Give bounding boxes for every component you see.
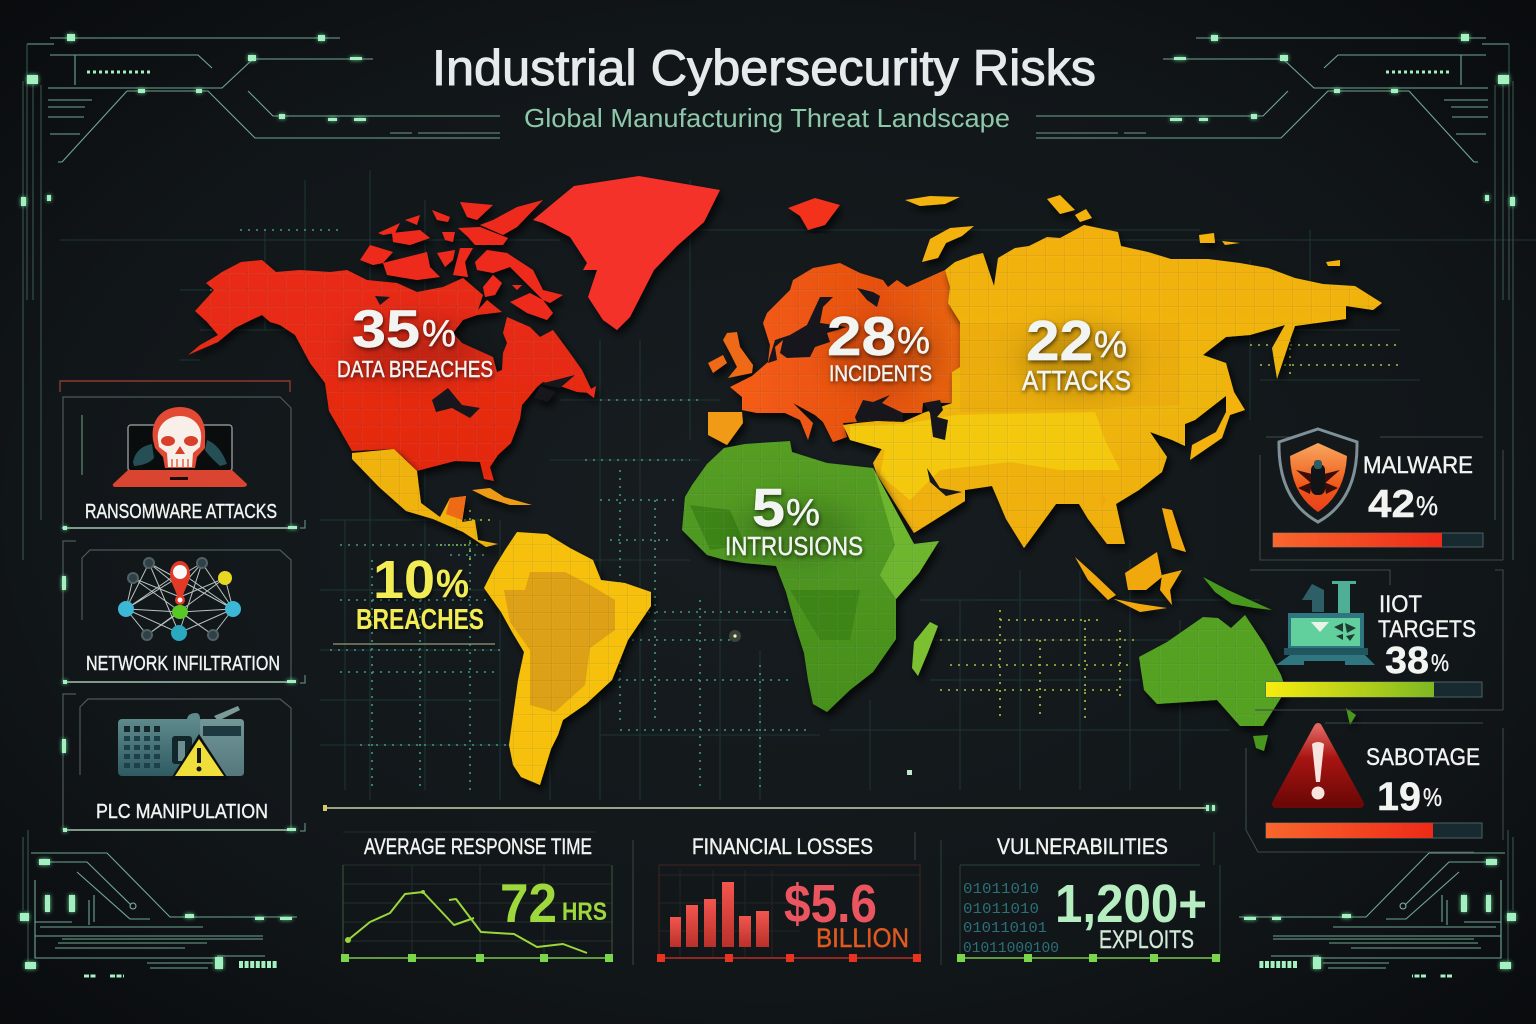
value: EXPLOITS bbox=[1099, 926, 1194, 954]
map label: North America 35%: 35 bbox=[352, 300, 420, 359]
label: SABOTAGE bbox=[1366, 744, 1480, 771]
title: Industrial Cybersecurity Risks bbox=[432, 40, 1096, 96]
header circuit traces bbox=[21, 34, 1515, 560]
binary code block: 010110101 bbox=[963, 920, 1047, 937]
label: IIOT bbox=[1379, 591, 1422, 618]
heading: AVERAGE RESPONSE TIME bbox=[364, 834, 592, 859]
label: NETWORK INFILTRATION bbox=[86, 652, 280, 675]
axis bbox=[957, 954, 1220, 962]
label: RANSOMWARE ATTACKS bbox=[85, 500, 277, 523]
region: Iceland bbox=[788, 198, 840, 230]
panel: IIoT targets bbox=[1250, 570, 1503, 710]
binary code block: 01011000100 bbox=[963, 940, 1059, 957]
region: Asia bbox=[843, 195, 1382, 612]
panel: network infiltration bbox=[62, 541, 305, 684]
divider above stats bbox=[323, 805, 1215, 811]
panel: PLC manipulation bbox=[62, 694, 305, 832]
panel: ransomware attacks bbox=[60, 381, 305, 530]
panel: vulnerabilities bbox=[941, 832, 1220, 965]
heading: VULNERABILITIES bbox=[997, 834, 1168, 859]
map label: South America 10% bbox=[333, 550, 495, 644]
value: HRS bbox=[562, 898, 607, 926]
map label: North America 35%: % bbox=[422, 313, 456, 355]
icon: PLC with warning triangle bbox=[118, 706, 244, 780]
map label: Europe 28%: 28 bbox=[827, 305, 896, 367]
icon: skull on laptop bbox=[113, 407, 247, 487]
value: 42 bbox=[1368, 483, 1415, 526]
heading: FINANCIAL LOSSES bbox=[692, 834, 873, 859]
map label: North America 35%: DATA BREACHES bbox=[337, 356, 493, 382]
map label: Europe 28%: INCIDENTS bbox=[829, 361, 932, 386]
binary code block bbox=[963, 881, 1059, 957]
map label: Asia 22%: 22 bbox=[1026, 309, 1093, 373]
label: PLC MANIPULATION bbox=[96, 800, 268, 823]
progress bar bbox=[1273, 533, 1483, 547]
region: North America bbox=[188, 200, 596, 481]
label: MALWARE bbox=[1363, 452, 1473, 479]
icon: industrial terminal bbox=[1276, 581, 1375, 665]
map label: South America 10%: % bbox=[436, 562, 469, 606]
map label: Africa 5% bbox=[725, 478, 863, 561]
map label: South America 10%: BREACHES bbox=[356, 604, 484, 636]
value: 38 bbox=[1385, 640, 1429, 682]
background circuit grid bbox=[60, 170, 1536, 800]
region: Mexico and Central America bbox=[352, 449, 532, 547]
region: Australia and Oceania bbox=[1139, 577, 1356, 751]
panel: financial losses bbox=[633, 832, 921, 965]
map label: Africa 5%: INTRUSIONS bbox=[725, 531, 863, 561]
value bbox=[1385, 640, 1449, 682]
panel: average response time bbox=[341, 832, 613, 962]
map label: Asia 22%: ATTACKS bbox=[1022, 365, 1131, 396]
map label: South America 10%: 10 bbox=[373, 550, 435, 610]
line chart bbox=[341, 890, 613, 962]
progress bar bbox=[1266, 823, 1482, 838]
progress bar bbox=[1266, 682, 1482, 697]
panel: malware bbox=[1260, 429, 1503, 560]
value: $5.6 bbox=[784, 874, 877, 934]
value bbox=[784, 874, 909, 953]
map label: Africa 5%: 5 bbox=[752, 478, 785, 538]
bottom corner circuit traces bbox=[20, 830, 1516, 976]
value bbox=[500, 872, 607, 934]
bar chart bbox=[657, 882, 921, 962]
value: % bbox=[1423, 784, 1442, 812]
icon: red warning triangle bbox=[1276, 727, 1360, 804]
value: 19 bbox=[1377, 775, 1421, 819]
map label: Africa 5%: % bbox=[786, 492, 820, 534]
binary code block: 01011010 bbox=[963, 881, 1039, 898]
region: Greenland bbox=[533, 176, 720, 330]
icon: shield with bug bbox=[1279, 429, 1357, 522]
map label: Europe 28%: % bbox=[897, 320, 930, 362]
value bbox=[1377, 775, 1442, 819]
panel: sabotage bbox=[1246, 723, 1503, 852]
map label: Europe 28% bbox=[827, 305, 932, 386]
text shade over land bbox=[345, 320, 1136, 560]
world map bbox=[188, 176, 1382, 785]
value bbox=[1368, 483, 1438, 526]
value: 1,200+ bbox=[1055, 874, 1207, 934]
value: % bbox=[1416, 491, 1438, 521]
value: 72 bbox=[500, 872, 557, 934]
value: BILLION bbox=[816, 923, 909, 953]
value: % bbox=[1431, 650, 1449, 677]
region: Europe bbox=[708, 263, 960, 445]
region: South America bbox=[484, 532, 651, 785]
binary code block: 01011010 bbox=[963, 901, 1039, 918]
label: TARGETS bbox=[1378, 616, 1476, 643]
icon: network with alert pin bbox=[118, 558, 241, 641]
map label: North America 35% bbox=[337, 300, 493, 382]
value bbox=[1055, 874, 1207, 954]
subtitle: Global Manufacturing Threat Landscape bbox=[524, 103, 1010, 133]
map label: Asia 22% bbox=[1022, 309, 1131, 396]
map label: Asia 22%: % bbox=[1094, 324, 1127, 366]
region: Africa bbox=[682, 441, 939, 712]
